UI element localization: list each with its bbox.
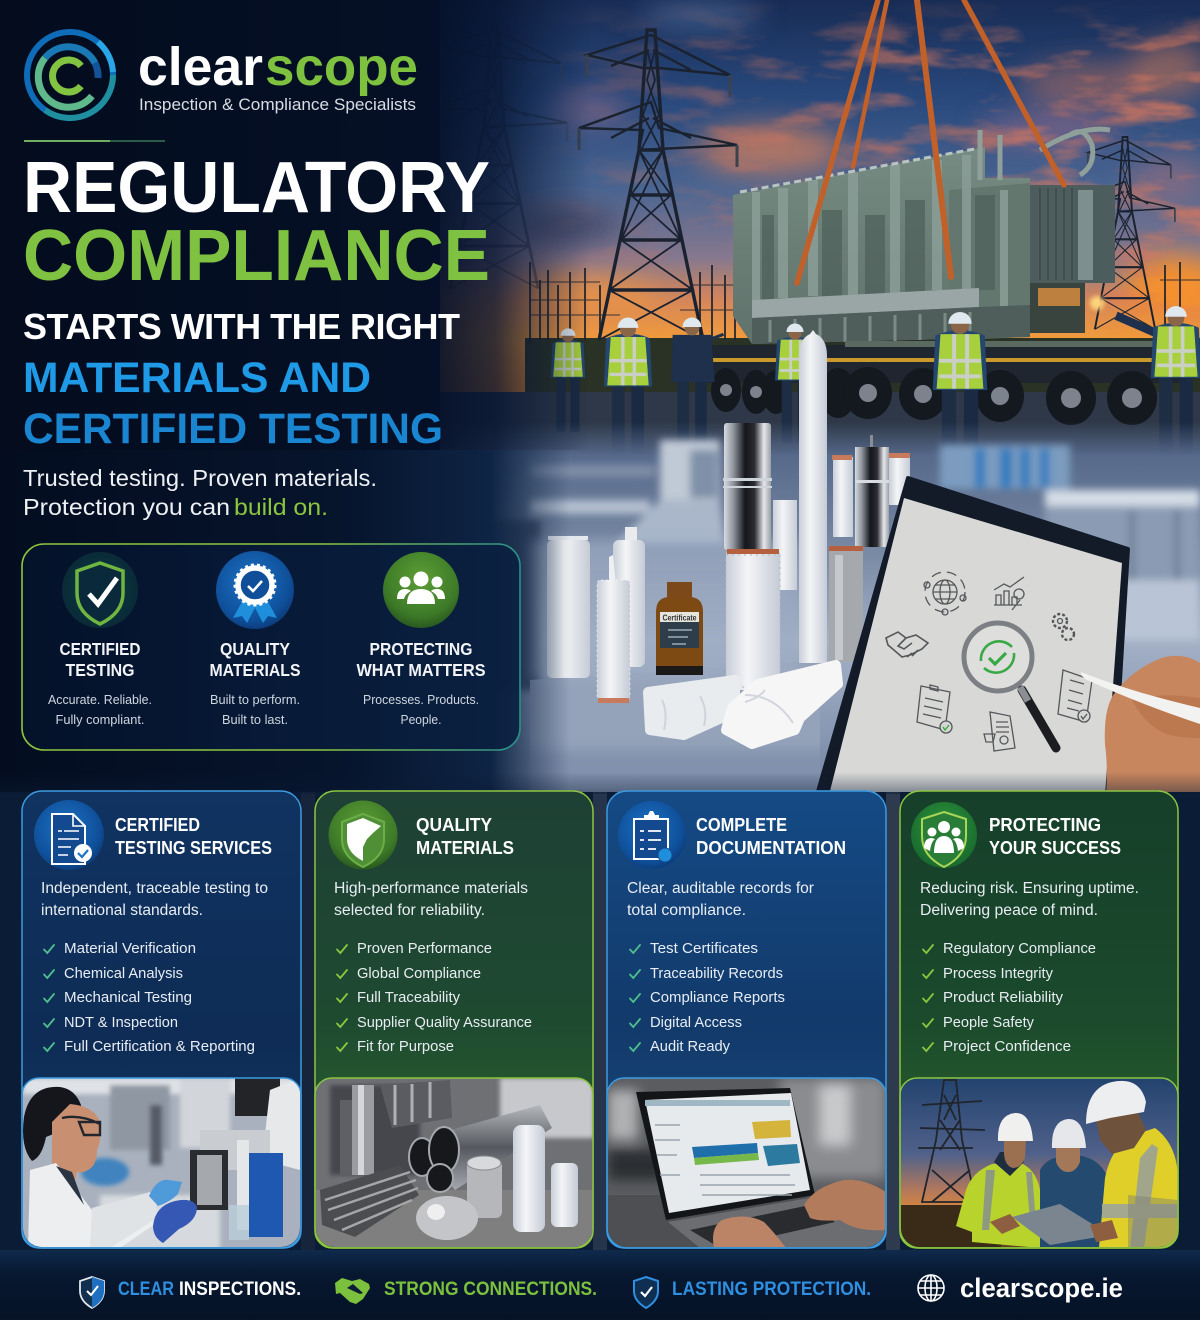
icon: handshake (886, 632, 928, 657)
filter with stem (613, 527, 645, 667)
checklist (923, 941, 1096, 1055)
pillar: certified testing: TESTING (66, 660, 134, 680)
lifting straps (797, 0, 1064, 283)
large pleated filter (726, 549, 780, 690)
card heading: MATERIALS (416, 837, 514, 858)
logo: scope (265, 37, 418, 97)
strapline: build on. (234, 494, 328, 520)
amber bottle (656, 582, 703, 675)
checklist: Regulatory Compliance (943, 941, 1096, 957)
substation silhouettes (530, 262, 1200, 342)
card description: total compliance. (627, 902, 746, 919)
icon: certified document (34, 800, 104, 870)
checklist: Product Reliability (943, 990, 1064, 1006)
pleated filter (597, 555, 630, 703)
icon: dim tower behind headline (466, 38, 568, 289)
card heading: COMPLETE (696, 814, 787, 835)
filter behind (773, 453, 910, 590)
card description (627, 880, 814, 919)
strapline: Protection you can (23, 494, 230, 520)
pillar: protecting what matters (356, 639, 486, 727)
heavy trailer (700, 341, 1180, 425)
card heading: QUALITY (416, 814, 493, 835)
card description: Clear, auditable records for (627, 880, 814, 897)
pillar: protecting what matters: PROTECTING (370, 639, 472, 659)
strapline: Trusted testing. Proven materials. (23, 465, 377, 491)
worker (604, 318, 652, 442)
right engineer (1099, 1128, 1178, 1248)
headline: COMPLIANCE (23, 216, 490, 296)
footer band (0, 1250, 1200, 1320)
checklist: Test Certificates (650, 941, 758, 957)
pillar: protecting what matters: People. (400, 712, 442, 727)
card heading (115, 814, 272, 858)
card heading: PROTECTING (989, 814, 1101, 835)
checklist: Digital Access (650, 1015, 742, 1031)
checklist: Project Confidence (943, 1039, 1071, 1055)
headline: STARTS WITH THE RIGHT (23, 306, 460, 347)
icon: quality rosette (216, 551, 294, 629)
ground (440, 392, 1200, 450)
card description: selected for reliability. (334, 902, 485, 919)
icon: handshake (335, 1278, 370, 1304)
strapline (23, 465, 377, 520)
chrome and grey cylinders (829, 435, 889, 662)
checklist: Fit for Purpose (357, 1039, 454, 1055)
footer: lasting protection (634, 1277, 871, 1308)
card heading: YOUR SUCCESS (989, 837, 1121, 858)
card heading (416, 814, 514, 858)
icon: globe (918, 1275, 944, 1301)
pillar: certified testing: Fully compliant. (56, 712, 144, 727)
card description: Reducing risk. Ensuring uptime. (920, 880, 1139, 897)
pillar: quality materials (210, 639, 300, 727)
left dark fade (0, 0, 590, 792)
card description: Delivering peace of mind. (920, 902, 1098, 919)
checklist (44, 941, 255, 1055)
wordmark: clear (138, 37, 263, 97)
checklist: Process Integrity (943, 966, 1054, 982)
icon: checklist (1058, 670, 1092, 722)
pillar: certified testing: CERTIFIED (60, 639, 140, 659)
worker (673, 318, 724, 450)
checklist (337, 941, 532, 1055)
footer: website: clearscope.ie (960, 1273, 1123, 1303)
worker (932, 312, 988, 440)
panel: protecting your success (900, 791, 1179, 1250)
pillar: quality materials: MATERIALS (210, 660, 300, 680)
panel: complete documentation (607, 791, 886, 1248)
icon: shield (634, 1277, 658, 1308)
card description: international standards. (41, 902, 203, 919)
icon: clipboard (618, 801, 686, 869)
checklist: Full Traceability (357, 990, 461, 1006)
divider (24, 140, 110, 142)
pillar: quality materials: Built to perform. (210, 692, 300, 707)
logo mark (27, 32, 113, 118)
logo (27, 32, 418, 118)
headline (23, 148, 490, 453)
checklist: Supplier Quality Assurance (357, 1015, 532, 1031)
icon: shield (328, 800, 398, 870)
pillar: certified testing: Accurate. Reliable. (48, 692, 152, 707)
footer: clear inspections (80, 1277, 301, 1308)
photo: metal components and filters (316, 1078, 594, 1248)
icon: people (383, 552, 459, 628)
field and horizon (525, 338, 1200, 398)
checklist: NDT & Inspection (64, 1015, 178, 1031)
icon: clipboard checklist (917, 685, 952, 733)
footer: clear inspections: INSPECTIONS. (179, 1279, 301, 1300)
photo: lab technician (23, 1078, 301, 1250)
pillar: quality materials: Built to last. (222, 712, 288, 727)
tablet (817, 478, 1200, 795)
icon: globe (924, 572, 966, 615)
tagline: Inspection & Compliance Specialists (139, 96, 416, 114)
checklist: Material Verification (64, 941, 196, 957)
photo: engineers at pylon (901, 1078, 1179, 1250)
checklist: Full Certification & Reporting (64, 1039, 255, 1055)
card description (41, 880, 268, 919)
worker (551, 328, 585, 432)
card heading: CERTIFIED (115, 814, 200, 835)
pillar: protecting what matters: WHAT MATTERS (356, 660, 486, 680)
icon: shield check (62, 552, 138, 628)
chrome cylinder (723, 423, 772, 550)
checklist: Global Compliance (357, 966, 481, 982)
pillar: certified testing (48, 639, 152, 727)
checklist: Audit Ready (650, 1039, 731, 1055)
card heading (696, 814, 846, 858)
left engineer (956, 1162, 1040, 1248)
transformer (733, 129, 1115, 344)
card heading: TESTING SERVICES (115, 837, 272, 858)
pillar: protecting what matters: Processes. Products. (363, 692, 479, 707)
footer: clear inspections: CLEAR (118, 1279, 174, 1300)
hand holding stylus (1081, 656, 1200, 795)
panel: three pillars (22, 544, 520, 750)
icon: magnifying glass with check (964, 623, 1056, 748)
icon: shield with team (911, 802, 977, 868)
icon: far pylon (1083, 137, 1175, 329)
photo: laptop with dashboard (608, 1078, 886, 1248)
photo: transformer lift at sunset (433, 0, 1200, 476)
checklist: Chemical Analysis (64, 966, 183, 982)
amber bottle: Certificate (662, 614, 697, 622)
card description: Independent, traceable testing to (41, 880, 268, 897)
lower background (0, 772, 1200, 1320)
card description (920, 880, 1139, 919)
checklist: Proven Performance (357, 941, 492, 957)
icon: pylon (579, 30, 737, 340)
headline: MATERIALS AND (23, 354, 371, 402)
worker (775, 324, 804, 442)
card heading (989, 814, 1121, 858)
white filter cartridge (547, 538, 590, 678)
worker (1116, 306, 1200, 457)
tall white filter (799, 330, 827, 663)
footer: lasting protection: LASTING PROTECTION. (672, 1279, 871, 1300)
checklist: Compliance Reports (650, 990, 785, 1006)
middle engineer (1040, 1156, 1107, 1248)
rolled filter media (648, 665, 838, 744)
card description: High-performance materials (334, 880, 528, 897)
pillar: quality materials: QUALITY (220, 639, 290, 659)
panel: certified testing services (22, 791, 301, 1250)
headline: CERTIFIED TESTING (23, 405, 443, 453)
footer: strong connections (335, 1278, 597, 1304)
icon: document (984, 712, 1015, 751)
panel: quality materials (315, 791, 594, 1248)
headline: REGULATORY (23, 148, 490, 228)
checklist: Mechanical Testing (64, 990, 192, 1006)
card description (334, 880, 528, 919)
checklist (630, 941, 785, 1055)
icon: gears (1053, 614, 1074, 640)
icon: growth chart (994, 577, 1024, 610)
card heading: DOCUMENTATION (696, 837, 846, 858)
checklist: People Safety (943, 1015, 1035, 1031)
footer: strong connections: STRONG CONNECTIONS. (384, 1279, 597, 1300)
icon: shield (80, 1277, 104, 1308)
photo: laboratory with filters and tablet (440, 330, 1200, 795)
checklist: Traceability Records (650, 966, 783, 982)
